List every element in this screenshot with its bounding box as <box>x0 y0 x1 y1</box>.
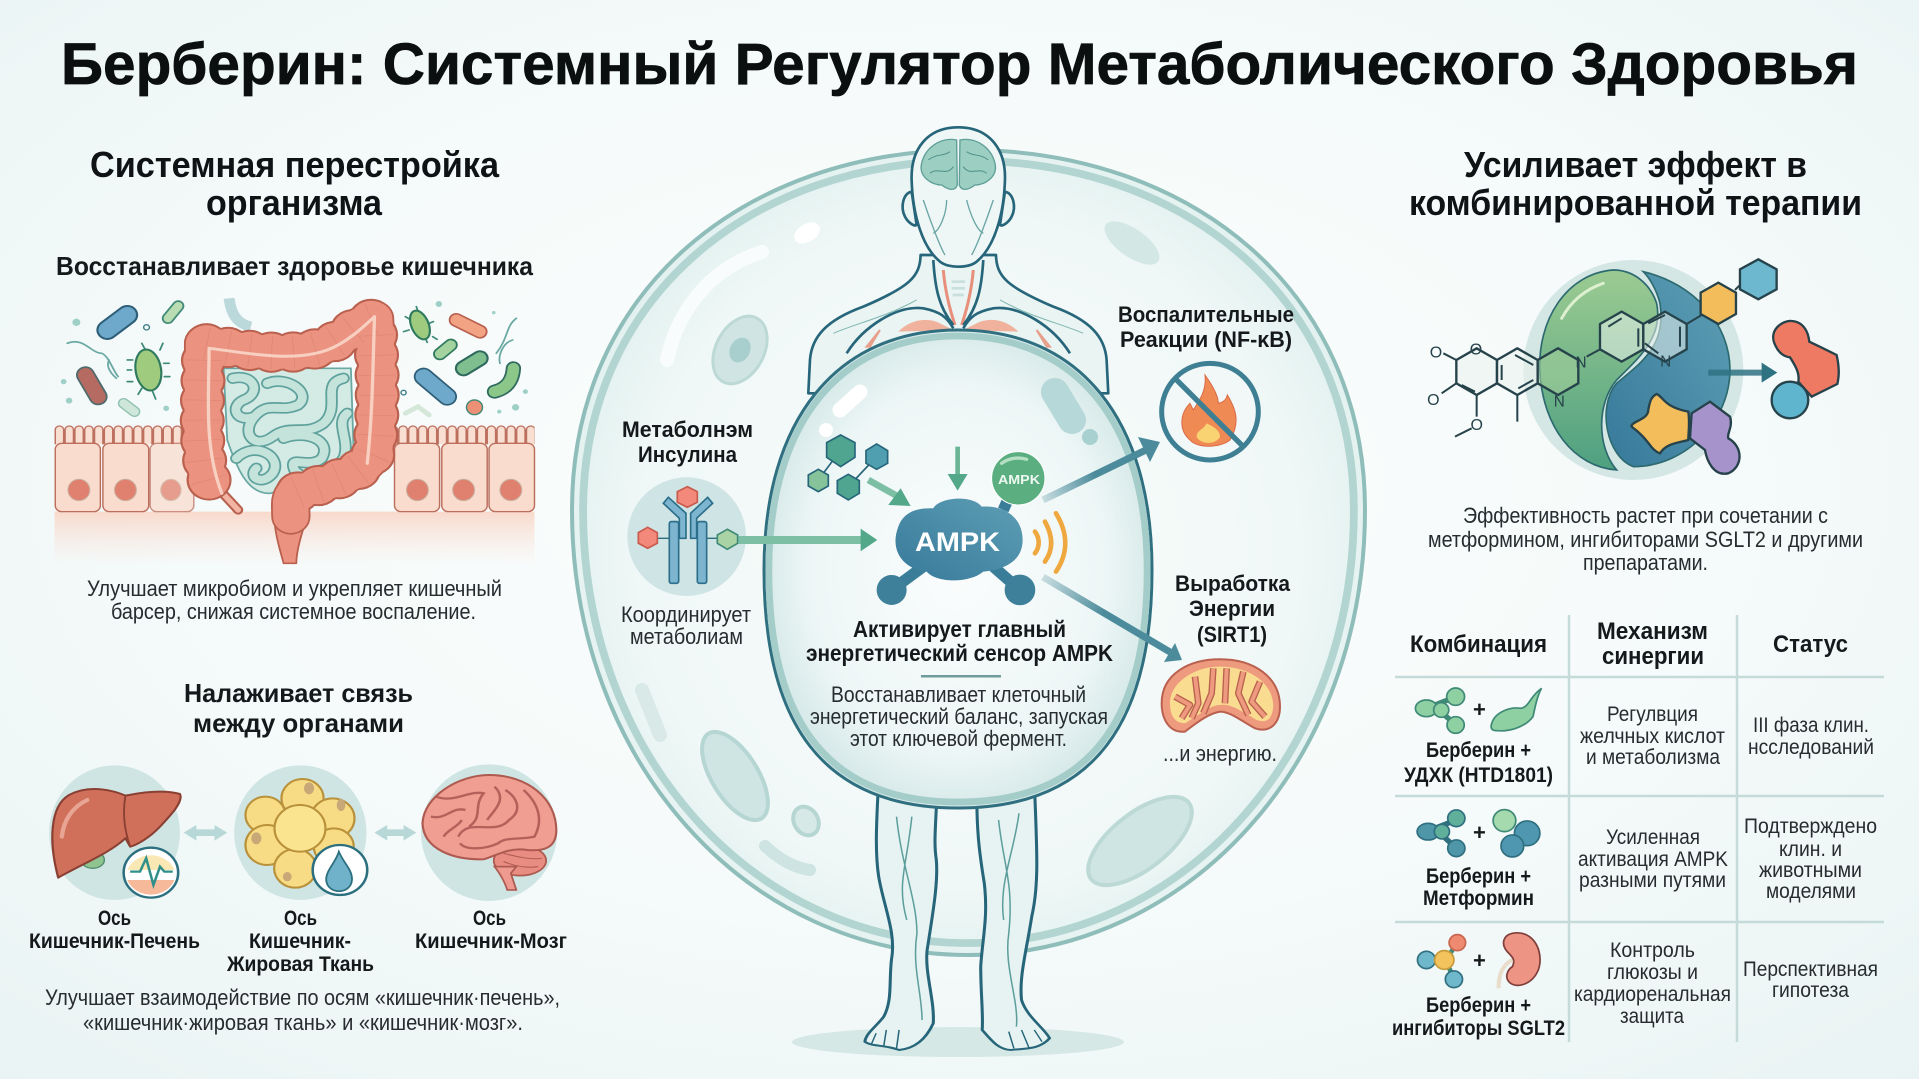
panel: right column <box>1392 144 1884 1042</box>
row 3: plus: + <box>1473 948 1486 973</box>
label: insulin metabolism: Метаболнэм <box>622 417 753 442</box>
row 1: mechanism: желчных кислот <box>1580 725 1725 748</box>
label: gut-fat axis <box>226 907 374 976</box>
text: AMPK heading: энергетический сенсор AMPK <box>806 640 1113 666</box>
row 2: status: клин. и <box>1779 838 1842 861</box>
row 2: plus: + <box>1473 820 1486 845</box>
label: gut-brain axis: Кишечник-Мозг <box>415 930 567 953</box>
text: and energy: ...и энергию. <box>1163 741 1277 766</box>
center content drawn in zoom coords <box>627 435 1065 605</box>
bacteria <box>67 306 516 415</box>
arrow: fat-brain <box>375 825 416 841</box>
label: energy production: Энергии <box>1189 596 1275 621</box>
head <box>903 127 1014 267</box>
heading: system rebuild <box>90 144 500 223</box>
illustration: organ axes <box>49 764 557 901</box>
text: coordinates metabolism: Координирует <box>621 602 751 627</box>
row 2: status: животными <box>1759 859 1862 882</box>
neck and lungs <box>833 260 1083 353</box>
label: energy production <box>1175 571 1291 647</box>
row 1: combination: Берберин + <box>1426 739 1531 762</box>
text: efficacy: препаратами. <box>1583 550 1708 575</box>
icon: yellow and purple ligands <box>1632 394 1689 453</box>
text: AMPK description <box>810 682 1108 751</box>
row 3: status: гипотеза <box>1772 979 1849 1002</box>
table: combinations <box>1392 615 1884 1042</box>
icon: receptor <box>627 477 746 596</box>
icon: result molecule <box>1773 321 1839 397</box>
row 3: combination: ингибиторы SGLT2 <box>1392 1017 1565 1040</box>
row 3: combination <box>1392 994 1565 1040</box>
row 1: combination <box>1404 739 1553 787</box>
label: inflammation: Реакции (NF-κB) <box>1120 327 1292 352</box>
row 1: status: нсследований <box>1748 736 1874 759</box>
row 1: combination: УДХК (HTD1801) <box>1404 764 1553 787</box>
text: AMPK small label: AMPK <box>998 472 1041 487</box>
row 3: mechanism: защита <box>1620 1005 1684 1028</box>
icon: green molecules <box>808 435 888 500</box>
row 2: combination: Метформин <box>1423 887 1534 910</box>
atom labels: O <box>1470 342 1482 359</box>
text: AMPK heading <box>806 616 1113 666</box>
label: gut-brain axis: Ось <box>473 907 506 930</box>
table header: синергии <box>1602 643 1704 670</box>
label: gut-fat axis: Жировая Ткань <box>226 953 374 976</box>
label: inflammation <box>1118 302 1294 352</box>
icon: brain in head <box>921 139 995 189</box>
text: coordinates metabolism <box>621 602 751 649</box>
text: AMPK description: этот ключевой фермент. <box>850 726 1067 751</box>
icon: drop badge <box>313 845 367 895</box>
row 3: status <box>1743 958 1878 1002</box>
arrow: molecules to AMPK <box>868 480 911 506</box>
row 2: combination: Берберин + <box>1426 865 1531 888</box>
text: axes: Улучшает взаимодействие по осям «кишечник·печень», <box>45 985 560 1010</box>
row 2: mechanism: активация AMPK <box>1578 848 1728 871</box>
icon: AMPK molecule <box>877 452 1045 605</box>
heading: organ axes: между органами <box>193 708 404 738</box>
heading: combination therapy <box>1409 144 1862 223</box>
atom labels <box>1427 342 1671 434</box>
row 3: mechanism <box>1574 939 1731 1028</box>
floor shadow <box>792 1027 1124 1057</box>
label: gut-liver axis: Кишечник-Печень <box>29 930 200 953</box>
row 3: status: Перспективная <box>1743 958 1878 981</box>
heading: organ axes: Налаживает связь <box>184 678 413 708</box>
row 2: mechanism <box>1578 826 1728 892</box>
text: microbiome: Улучшает микробиом и укрепляет кишечный <box>87 576 502 601</box>
label: gut-fat axis: Ось <box>284 907 317 930</box>
illustration: gut and microbiome <box>55 298 534 565</box>
heading: organ axes <box>184 678 413 738</box>
arrow: to result <box>1708 363 1777 383</box>
icon: liver <box>52 789 181 878</box>
label: inflammation: Воспалительные <box>1118 302 1294 327</box>
text: microbiome: барсер, снижая системное воспаление. <box>111 599 476 624</box>
icon: fat cells <box>245 779 355 888</box>
atom labels: O <box>1470 417 1483 434</box>
label: insulin metabolism: Инсулина <box>638 442 738 467</box>
table header: Статус <box>1773 631 1848 658</box>
row 1: status: III фаза клин. <box>1753 714 1869 737</box>
body: legs <box>865 780 1050 1050</box>
row 2: mechanism: разными путями <box>1579 869 1726 892</box>
text: microbiome <box>87 576 502 624</box>
heading: system rebuild: организма <box>206 182 383 223</box>
panel: left column <box>29 144 567 1035</box>
outer cell <box>572 150 1365 955</box>
icon: signal waves <box>1035 513 1065 572</box>
label: gut-fat axis: Кишечник- <box>249 930 351 953</box>
atom labels: N <box>1660 353 1671 370</box>
small intestine <box>224 298 355 493</box>
table header: Механизм <box>1597 618 1708 645</box>
row 2: combination <box>1423 865 1534 910</box>
label: gut-liver axis <box>29 907 200 953</box>
illustration: berberine molecule and targets <box>1427 259 1839 480</box>
row 1: mechanism: Регулвция <box>1607 703 1698 726</box>
text: AMPK description: Восстанавливает клеточный <box>831 682 1086 707</box>
arrow: liver-fat <box>184 825 227 841</box>
arrow: to energy <box>1043 577 1182 662</box>
title: Берберин: Системный Регулятор Метаболического Здоровья <box>61 32 1858 97</box>
row 2: mechanism: Усиленная <box>1606 826 1700 849</box>
label: insulin metabolism <box>622 417 753 467</box>
row 1: mechanism: и метаболизма <box>1586 746 1720 769</box>
colon <box>202 317 377 563</box>
shoulders <box>808 255 1108 393</box>
text: coordinates metabolism: метаболиам <box>630 624 743 649</box>
inner cell <box>764 330 1152 808</box>
heading: combination therapy: Усиливает эффект в <box>1464 144 1807 185</box>
icon: no fire <box>1162 363 1258 460</box>
text: AMPK main label: AMPK <box>915 527 1001 557</box>
icon: pulse badge <box>124 848 178 898</box>
row 3: mechanism: глюкозы и <box>1607 961 1698 984</box>
row 3: mechanism: кардиоренальная <box>1574 983 1731 1006</box>
label: gut-brain axis <box>415 907 567 953</box>
table header <box>1410 618 1848 670</box>
label: energy production: (SIRT1) <box>1197 622 1267 647</box>
row 1: plus: + <box>1473 697 1486 722</box>
text: AMPK heading: Активирует главный <box>853 616 1066 642</box>
atom labels: N <box>1554 393 1565 410</box>
icon: mitochondrion <box>1162 659 1280 732</box>
arrow: to inflammation <box>1043 437 1160 500</box>
chemical structure <box>1456 312 1687 395</box>
body: head and shoulders <box>808 127 1108 393</box>
icon: brain <box>423 775 556 890</box>
panel: central cell and body <box>572 127 1365 1057</box>
table header: Комбинация <box>1410 631 1547 658</box>
text: axes: «кишечник·жировая ткань» и «кишечник·мозг». <box>83 1010 523 1035</box>
text: axes <box>45 985 560 1035</box>
subheading: gut health: Восстанавливает здоровье кишечника <box>56 251 534 281</box>
atom labels: O <box>1427 392 1440 409</box>
cell organelles <box>642 213 1206 901</box>
row 1: mechanism <box>1580 703 1725 769</box>
label: gut-liver axis: Ось <box>98 907 131 930</box>
text: efficacy: метформином, ингибиторами SGLT2 и другими <box>1428 527 1863 552</box>
heading: combination therapy: комбинированной терапии <box>1409 182 1862 223</box>
arrow: down to AMPK <box>948 447 968 491</box>
text: efficacy <box>1428 503 1863 575</box>
arrow: insulin to AMPK <box>738 529 877 551</box>
row 2: status: Подтверждено <box>1744 815 1877 838</box>
text: efficacy: Эффективность растет при сочетании с <box>1463 503 1828 528</box>
table icons <box>1415 688 1542 988</box>
row 1: status <box>1748 714 1874 759</box>
atom labels: N <box>1575 354 1587 371</box>
text: AMPK description: энергетический баланс, запуская <box>810 704 1108 729</box>
row 2: status: моделями <box>1766 880 1856 903</box>
heading: system rebuild: Системная перестройка <box>90 144 500 185</box>
row 3: combination: Берберин + <box>1426 994 1531 1017</box>
row 3: mechanism: Контроль <box>1610 939 1695 962</box>
row 2: status <box>1744 815 1877 903</box>
atom labels: O <box>1430 344 1442 361</box>
label: energy production: Выработка <box>1175 571 1291 596</box>
